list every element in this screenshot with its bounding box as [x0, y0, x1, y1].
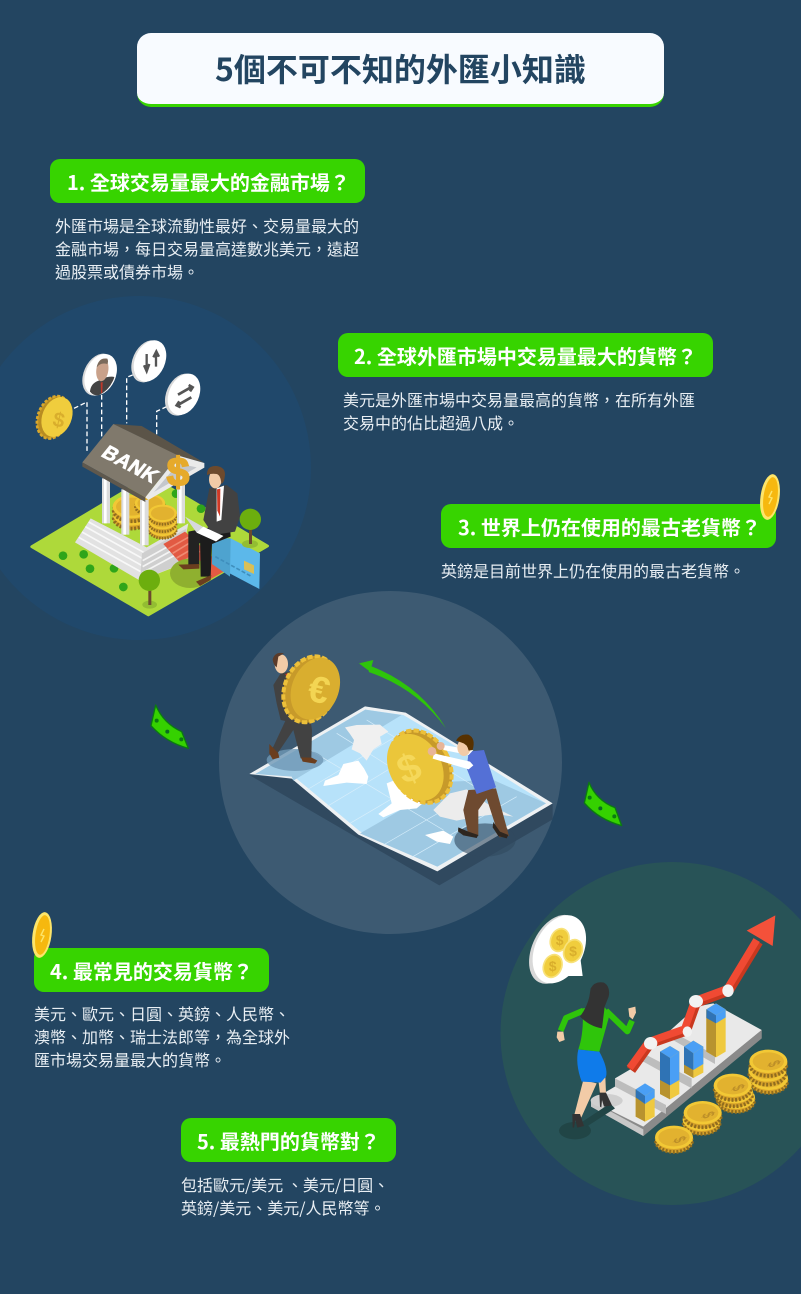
coins in bank	[113, 494, 177, 539]
speech bubble with coins: $	[556, 932, 564, 948]
bar: tallest	[706, 1003, 726, 1057]
heading 1: 1. 全球交易量最大的金融市場？	[67, 167, 350, 196]
continents	[323, 725, 513, 844]
coin stacks: $	[668, 1134, 689, 1146]
gold dollar sign: $	[167, 451, 189, 495]
text block 4	[34, 1001, 290, 1071]
map shadow	[249, 775, 553, 885]
heading 1	[50, 159, 365, 203]
text block 4: 美元、歐元、日圓、英鎊、人民幣、	[34, 1001, 290, 1025]
illustration: map with two men exchanging coins	[249, 647, 553, 885]
background circle: growth	[500, 862, 801, 1205]
heading 3	[441, 504, 776, 548]
speech bubble with coins: $	[569, 943, 577, 959]
text block 2: 美元是外匯市場中交易量最高的貨幣，在所有外匯	[343, 387, 695, 411]
text block 1: 過股票或債券市場。	[55, 259, 199, 283]
man pushing dollar coin: $	[391, 744, 428, 793]
dashed connectors	[74, 375, 167, 453]
coin stacks: $	[697, 1109, 718, 1121]
stair base	[591, 1003, 762, 1136]
icon: vertical arrows badge	[125, 335, 173, 388]
title: 5個不可不知的外匯小知識	[215, 45, 586, 91]
red carpet	[163, 532, 227, 585]
roof: BANK	[97, 442, 163, 487]
heading 2	[338, 333, 713, 377]
icon: green banknote right	[584, 782, 622, 826]
text block 3: 英鎊是目前世界上仍在使用的最古老貨幣。	[441, 558, 745, 582]
text block 5: 包括歐元/美元 、美元/日圓、	[181, 1172, 389, 1196]
icon: dollar coin	[31, 391, 78, 444]
ground platform	[32, 476, 268, 615]
heading 2: 2. 全球外匯市場中交易量最大的貨幣？	[354, 341, 697, 370]
text block 1: 外匯市場是全球流動性最好、交易量最大的	[55, 213, 359, 237]
credit card	[212, 538, 260, 589]
heading 4: 4. 最常見的交易貨幣？	[50, 956, 253, 985]
woman running	[557, 982, 636, 1139]
trees	[139, 509, 261, 609]
heading 4	[34, 948, 269, 992]
text block 1	[55, 213, 359, 283]
world map sheet	[249, 706, 553, 871]
title	[137, 33, 664, 107]
man with laptop	[170, 466, 240, 588]
roof	[82, 424, 204, 502]
green curved arrow	[359, 660, 446, 728]
background circle: map	[219, 591, 562, 934]
coin stacks: $	[763, 1058, 783, 1070]
text block 5: 英鎊/美元、美元/人民幣等。	[181, 1195, 386, 1219]
text block 4: 澳幣、加幣、瑞士法郎等，為全球外	[34, 1024, 290, 1048]
heading 5	[181, 1118, 396, 1162]
shadows under characters	[267, 749, 516, 857]
text block 2: 交易中的佔比超過八成。	[343, 410, 519, 434]
icon: gold coin near heading 3	[760, 474, 780, 520]
man pushing dollar coin	[376, 719, 509, 838]
coin stacks	[655, 1050, 788, 1153]
speech bubble with coins: $	[549, 958, 557, 974]
grid lines	[307, 720, 517, 858]
icon: dollar coin: $	[51, 408, 67, 433]
text block 1: 金融市場，每日交易量高達數兆美元，遠超	[55, 236, 359, 260]
illustration: woman climbing growth chart	[519, 906, 788, 1153]
bar: medium	[684, 1041, 703, 1078]
coin stacks: $	[727, 1082, 748, 1094]
man carrying euro coin	[269, 647, 349, 764]
text block 2	[343, 387, 695, 434]
icon: green banknote left	[151, 705, 188, 748]
columns	[102, 478, 185, 545]
icon: person badge	[76, 348, 123, 401]
speech bubble with coins	[519, 906, 597, 992]
bar: short	[636, 1083, 655, 1122]
illustration: bank	[31, 335, 268, 615]
heading 5: 5. 最熱門的貨幣對？	[197, 1126, 380, 1155]
heading 3: 3. 世界上仍在使用的最古老貨幣？	[458, 512, 761, 541]
red rising arrow	[630, 915, 775, 1070]
background circle: bank	[0, 296, 311, 640]
icon: horizontal arrows badge	[159, 368, 207, 421]
bar: tall left	[660, 1046, 679, 1099]
green shrubs	[59, 489, 205, 591]
building steps	[75, 518, 188, 581]
text block 4: 匯市場交易量最大的貨幣。	[34, 1047, 226, 1071]
text block 5	[181, 1172, 389, 1219]
man carrying euro coin: €	[304, 666, 335, 712]
icon: gold coin near heading 4	[32, 912, 52, 958]
